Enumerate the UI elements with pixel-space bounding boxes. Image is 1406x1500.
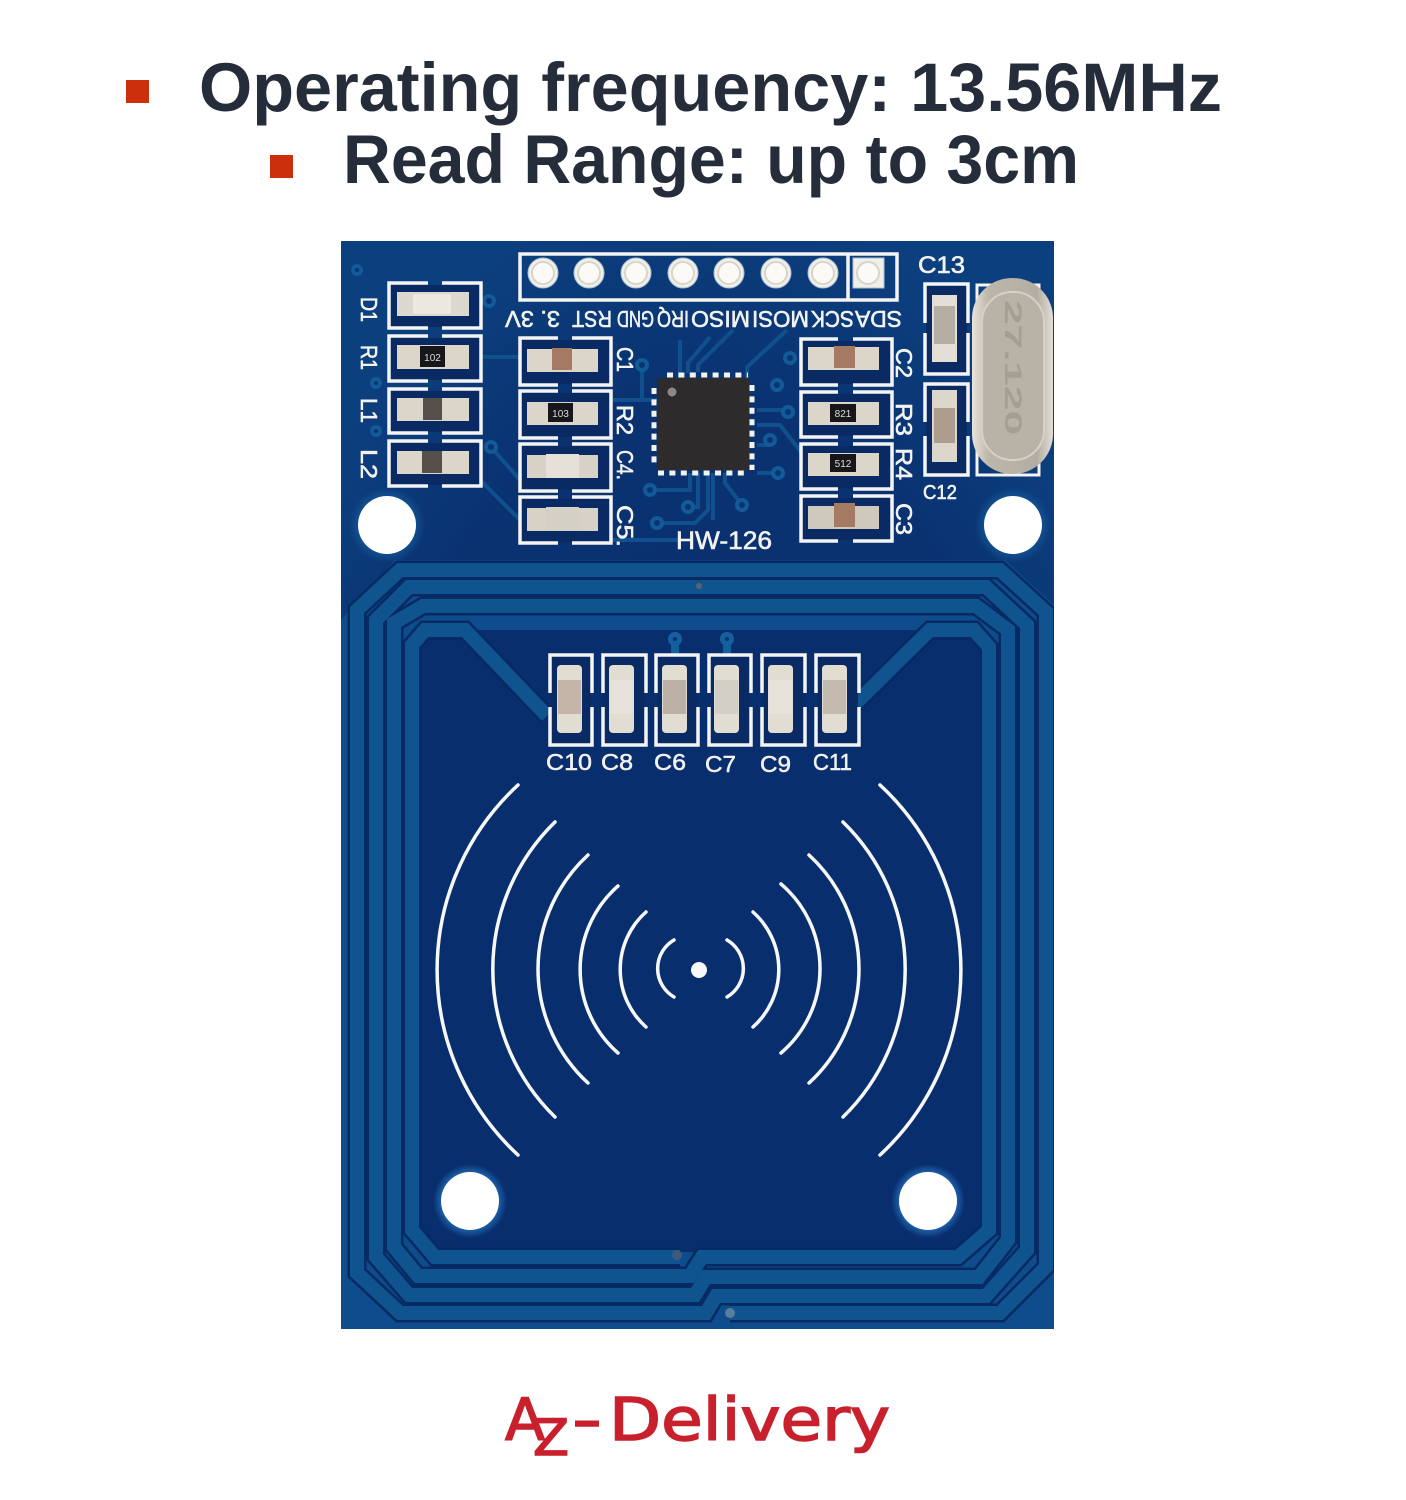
capacitor labels: C6	[654, 749, 686, 775]
box interiors	[390, 285, 480, 485]
antenna capacitor vias	[668, 632, 734, 654]
box interiors	[803, 341, 891, 540]
pin labels	[504, 306, 902, 332]
chip body	[657, 378, 749, 470]
LED D1	[397, 292, 469, 316]
board substrate	[341, 241, 1054, 1329]
C13 and C12 silkscreen boxes	[925, 284, 968, 475]
silkscreen boxes	[389, 283, 481, 486]
pin labels: RST	[572, 306, 612, 332]
capacitor labels: C10	[546, 749, 592, 775]
pin hole centres	[532, 262, 879, 284]
coil shadow	[357, 570, 1046, 1313]
component labels: R4	[891, 448, 917, 480]
capacitor C13	[932, 295, 957, 362]
right component column	[801, 339, 917, 541]
component labels: L1	[356, 398, 382, 423]
component labels: R2	[612, 405, 638, 435]
component labels: R1	[356, 345, 382, 370]
component labels: D1	[356, 297, 382, 322]
coil vias	[672, 583, 735, 1318]
pin labels: 3. 3V	[504, 306, 560, 332]
silkscreen boxes	[801, 339, 892, 541]
antenna coil traces	[357, 570, 1046, 1313]
logo: AZ-Delivery	[505, 1385, 890, 1467]
inductor L2	[397, 451, 469, 474]
crystal pad	[977, 285, 1039, 475]
logo: AZ-Delivery: Z	[533, 1409, 569, 1467]
component labels	[891, 348, 917, 535]
crystal oscillator: 27.120	[999, 300, 1026, 435]
left component column	[356, 283, 481, 486]
antenna capacitor bank	[546, 655, 859, 777]
pin-1 marker	[668, 388, 676, 396]
component labels	[612, 347, 638, 547]
label C12: C12	[923, 482, 957, 504]
pin labels: IRQ	[657, 306, 689, 332]
heading line: read range: Read Range: up to 3cm	[343, 121, 1079, 198]
capacitor C2	[808, 346, 879, 370]
capacitor labels: C11	[813, 749, 852, 775]
board code: HW-126	[676, 527, 772, 555]
pin labels: GND	[617, 306, 654, 332]
pin labels: SDA	[854, 306, 902, 332]
mounting holes	[349, 487, 1051, 1238]
crystal section	[918, 252, 1053, 504]
component labels: R3	[891, 403, 917, 436]
contactless wave symbol	[437, 785, 961, 1155]
capacitor C3	[808, 503, 879, 529]
header pads	[528, 258, 884, 288]
component labels: C3	[891, 503, 917, 535]
resistor R3: 821	[835, 409, 852, 420]
resistor R4	[808, 453, 879, 476]
capacitor C12	[932, 390, 957, 462]
box interiors	[551, 657, 858, 744]
resistor R3	[808, 402, 879, 425]
component labels: L2	[356, 449, 382, 479]
pin header	[504, 254, 902, 332]
pin labels: MISO	[691, 306, 750, 332]
logo: AZ-Delivery: -	[572, 1385, 602, 1454]
inductor L1	[397, 398, 469, 421]
bullet: read range	[270, 155, 293, 178]
header outline	[520, 254, 897, 300]
capacitor labels: C9	[760, 751, 791, 777]
resistor R1: 102	[424, 353, 441, 364]
component labels: C1	[612, 347, 638, 372]
pin labels: SCK	[810, 306, 854, 332]
component labels: C5.	[612, 505, 638, 547]
heading: specifications	[126, 49, 1222, 198]
capacitor labels	[546, 749, 852, 777]
component labels	[356, 297, 382, 479]
copper traces top area	[353, 266, 815, 540]
box interiors	[521, 340, 610, 542]
silkscreen boxes	[550, 655, 859, 745]
capacitor C1	[527, 348, 598, 372]
capacitors	[557, 665, 847, 733]
component labels: C4.	[612, 450, 638, 480]
box interiors	[926, 286, 967, 474]
heading line: operating frequency: Operating frequency: 13.56MHz	[199, 49, 1222, 126]
pin labels: MOSI	[752, 306, 809, 332]
coil margin	[341, 560, 1054, 1329]
RFID circuit board	[341, 241, 1054, 1329]
capacitor C4	[527, 454, 598, 478]
resistor R1	[397, 345, 469, 369]
coil inner end	[412, 630, 680, 1257]
coil interior	[420, 630, 990, 1252]
controller chip	[654, 375, 752, 473]
resistor R2	[527, 402, 598, 425]
capacitor labels: C7	[705, 751, 736, 777]
capacitor bodies	[558, 680, 846, 714]
component labels: C2	[891, 348, 917, 378]
coil spiral	[357, 570, 1046, 1313]
capacitor labels: C8	[601, 749, 633, 775]
capacitor C5	[527, 507, 598, 531]
logo: AZ-Delivery: Delivery	[609, 1385, 890, 1454]
crystal oscillator	[972, 278, 1053, 474]
label C13: C13	[918, 252, 965, 279]
resistor R4: 512	[835, 459, 852, 470]
bullet: frequency	[126, 80, 149, 103]
logo: AZ-Delivery: A	[505, 1386, 545, 1454]
resistor R2: 103	[552, 409, 569, 420]
silkscreen boxes	[520, 338, 611, 543]
middle-left component column	[520, 338, 638, 547]
chip pins	[654, 375, 752, 473]
